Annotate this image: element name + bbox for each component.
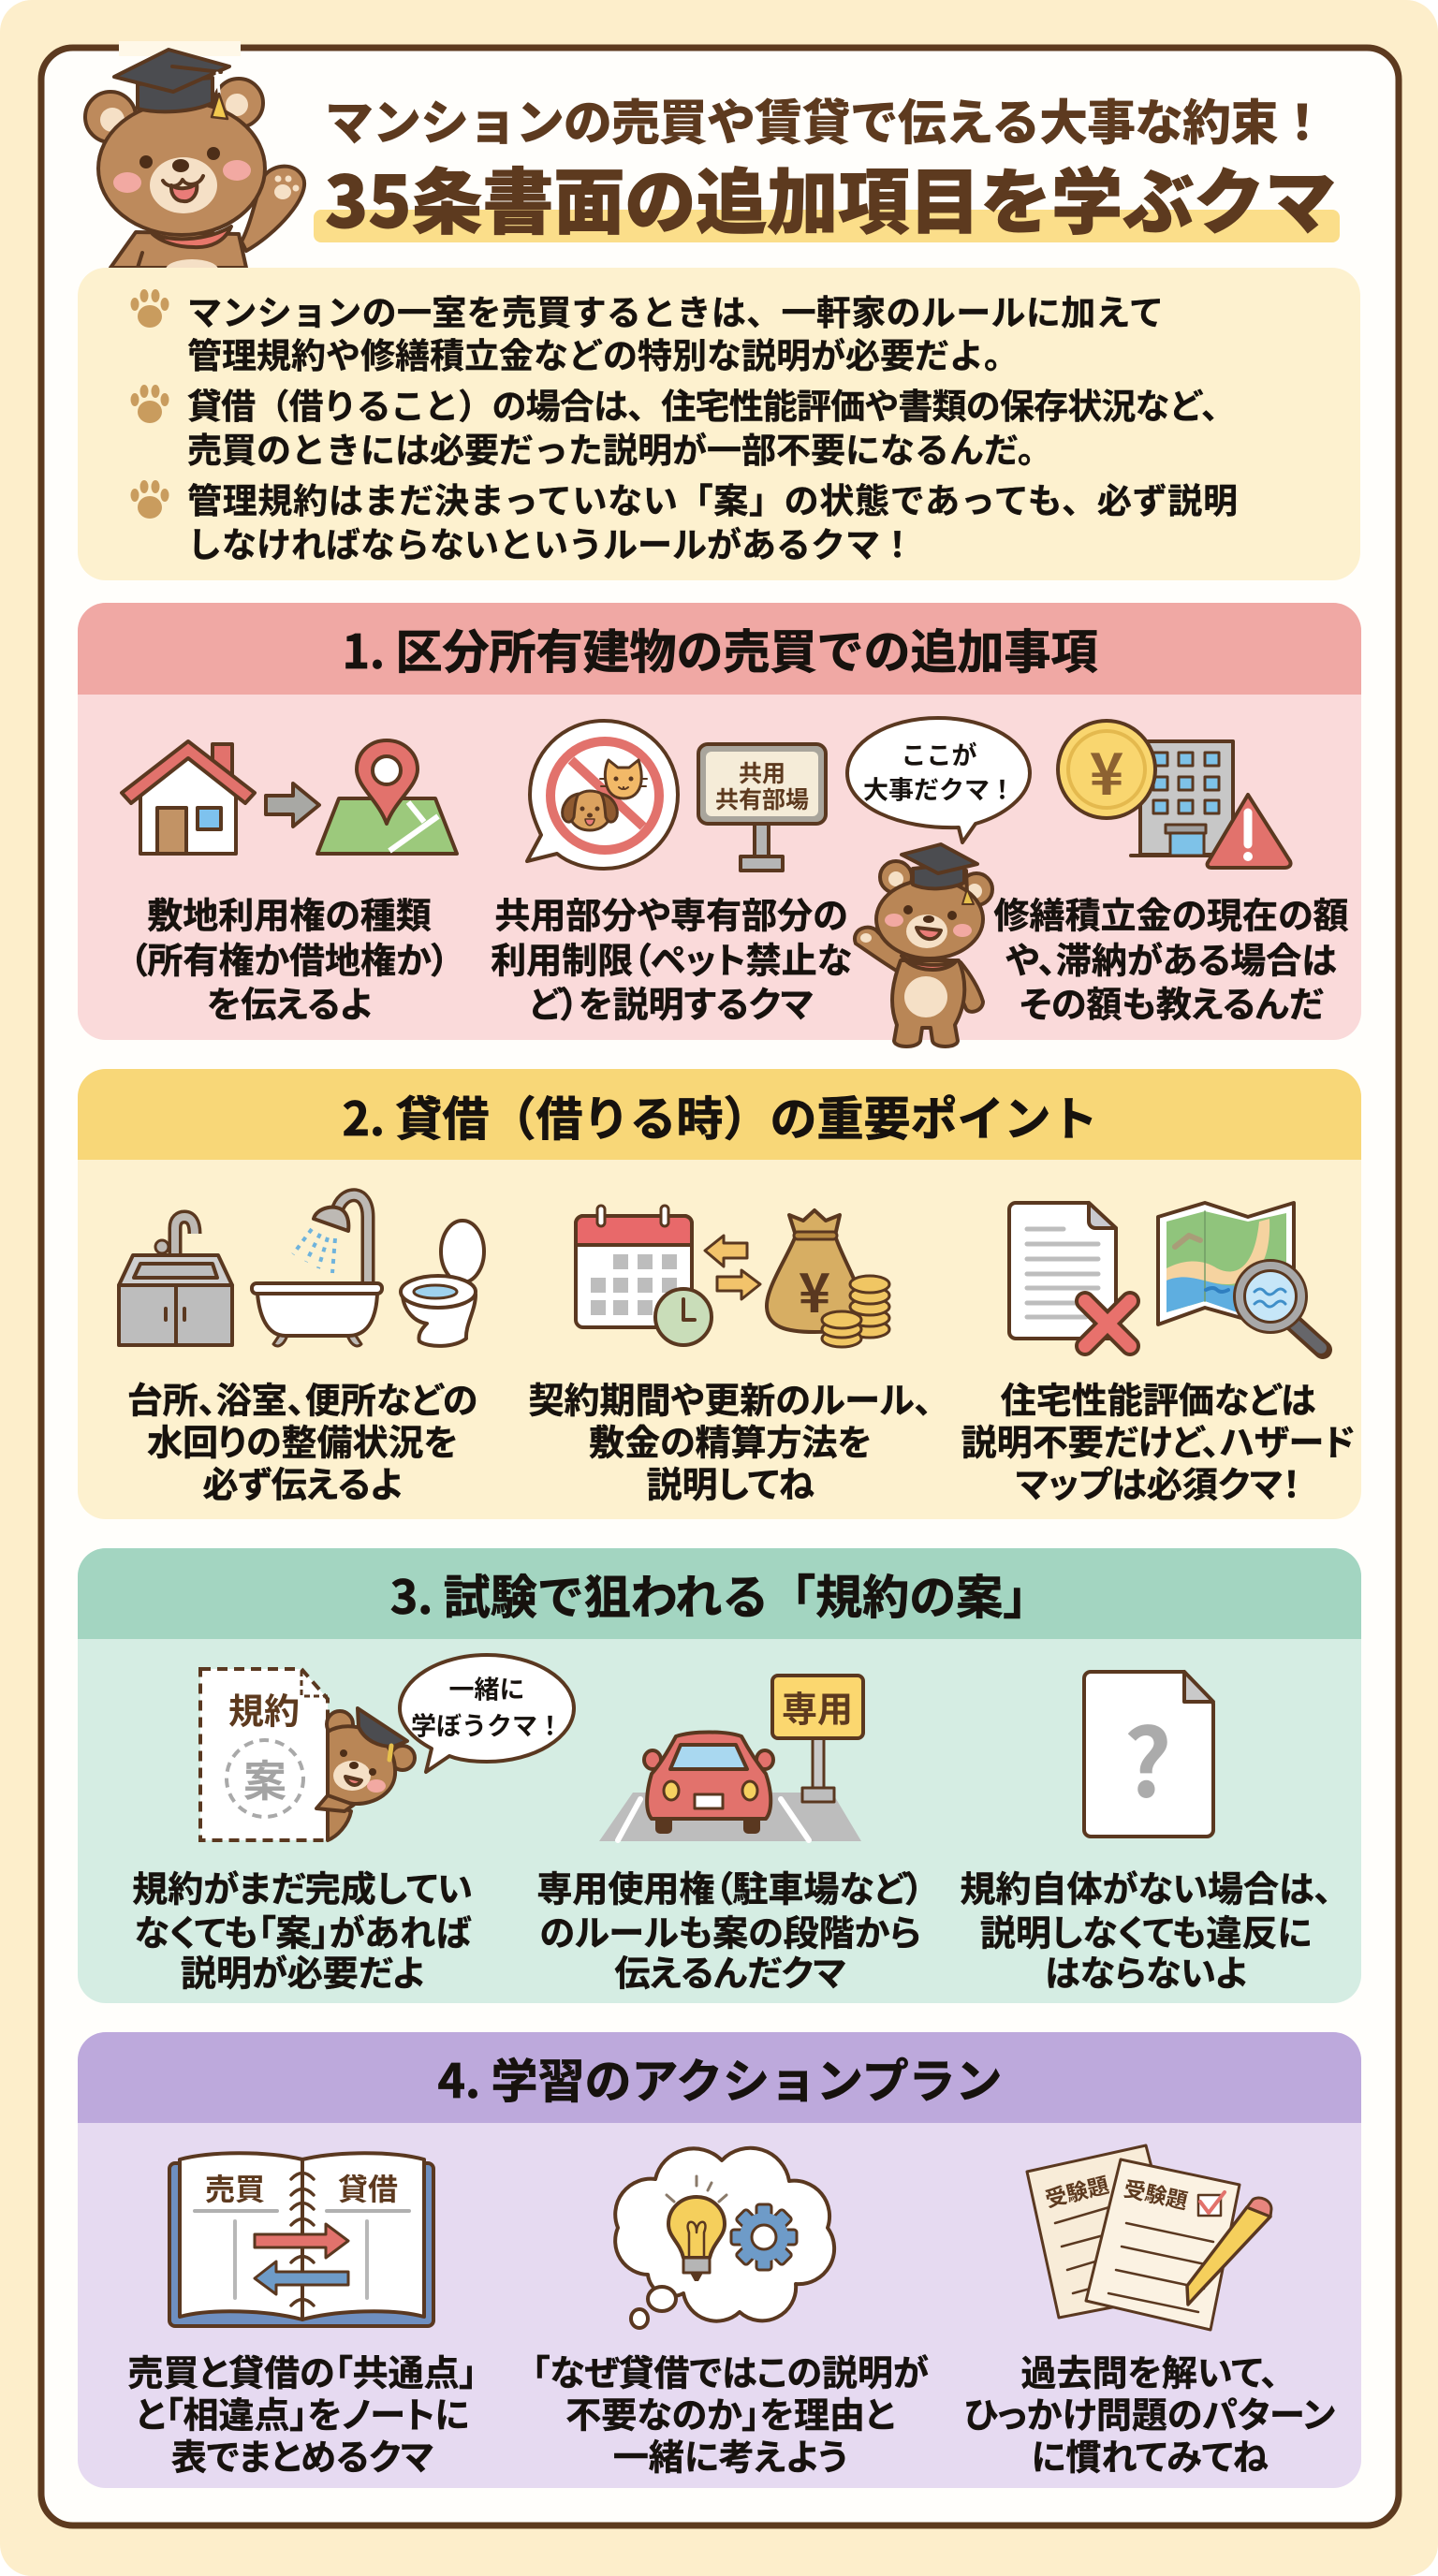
icon: past exam papers and pencil: 受験題 (1041, 2167, 1112, 2214)
intro text: 貸借（借りること）の場合は、住宅性能評価や書類の保存状況など、 (187, 378, 1236, 429)
caption 2-1: 水回りの整備状況を (147, 1413, 458, 1466)
subtitle: マンションの売買や賃貸で伝える大事な約束！ (325, 84, 1327, 154)
caption 1-1 (129, 887, 449, 1028)
caption 4-1: 売買と貸借の「共通点」 (127, 2344, 477, 2396)
caption 1-2: 利用制限（ペット禁止な (491, 932, 852, 983)
caption 3-2: のルールも案の段階から (539, 1904, 921, 1956)
caption 1-3: その額も教えるんだ (1020, 975, 1324, 1028)
caption 4-2: 一緒に考えよう (613, 2428, 847, 2481)
icon: draft rules document: 案 (243, 1748, 286, 1809)
caption 1-2: ど）を説明するクマ (529, 975, 814, 1028)
intro text: 売買のときには必要だった説明が一部不要になるんだ。 (187, 422, 1052, 473)
icon: draft rules document (200, 1669, 328, 1840)
icon: peeking bear (316, 1708, 415, 1840)
caption 4-3 (964, 2344, 1335, 2481)
icon: sink bath toilet (119, 1195, 484, 1346)
caption 2-1: 必ず伝えるよ (202, 1456, 403, 1507)
caption 2-3: 説明不要だけど、ハザード (961, 1413, 1355, 1466)
icon: past exam papers and pencil: 受験題 (1122, 2171, 1191, 2216)
caption 3-2: 専用使用権（駐車場など） (536, 1861, 924, 1911)
caption 3-1: 説明が必要だよ (181, 1945, 424, 1996)
caption 3-3: 規約自体がない場合は、 (960, 1861, 1332, 1911)
caption 2-2: 契約期間や更新のルール、 (528, 1372, 932, 1423)
speech bubble: 一緒に学ぼうクマ: 学ぼうクマ！ (411, 1705, 563, 1743)
icon: car and reserved sign (599, 1676, 863, 1841)
speech bubble: ここが大事だクマ: ここが (901, 736, 977, 771)
caption 2-2 (528, 1372, 932, 1507)
caption 2-2: 説明してね (646, 1456, 814, 1507)
icon: past exam papers and pencil (1027, 2145, 1271, 2330)
icon: hazard map with magnifier (1158, 1203, 1323, 1350)
caption 2-3 (961, 1372, 1355, 1507)
caption 1-2 (491, 887, 852, 1028)
caption 3-3 (960, 1861, 1332, 1996)
caption 3-2 (536, 1861, 924, 1996)
section 1 header (78, 603, 1361, 695)
icon: open notebook (169, 2153, 433, 2326)
icon: shared area sign: 共用 (739, 755, 785, 789)
intro text (187, 285, 1238, 567)
icon: shared area sign (698, 744, 826, 871)
caption 4-2: 「なぜ貸借ではこの説明が (532, 2344, 929, 2396)
bear mascot: header (85, 50, 304, 280)
section 1 header: 1. 区分所有建物の売買での追加事項 (342, 615, 1098, 682)
icon: calendar and money (576, 1206, 889, 1347)
caption 2-3: 住宅性能評価などは (1001, 1372, 1315, 1423)
caption 4-1: と「相違点」をノートに (136, 2387, 469, 2437)
caption 3-1: 規約がまだ完成してい (132, 1861, 473, 1911)
icon: calendar and money: ¥ (799, 1250, 830, 1328)
caption 4-1 (127, 2344, 477, 2481)
caption 1-1: 敷地利用権の種類 (147, 887, 432, 938)
section 4 header (78, 2032, 1361, 2123)
caption 3-2: 伝えるんだクマ (614, 1945, 846, 1996)
main title: 35条書面の追加項目を学ぶクマ (325, 145, 1336, 248)
title highlight bar (314, 210, 1340, 242)
speech bubble: 一緒に学ぼうクマ (400, 1655, 574, 1772)
speech bubble: ここが大事だクマ: 大事だクマ！ (863, 769, 1015, 807)
intro text: しなければならないというルールがあるクマ！ (187, 517, 915, 567)
intro text: マンションの一室を売買するときは、一軒家のルールに加えて (187, 285, 1164, 335)
title (314, 84, 1340, 248)
panel: section 3 (78, 1548, 1361, 2003)
icon: bear standing (855, 844, 992, 1046)
section 2 header: 2. 貸借（借りる時）の重要ポイント (342, 1082, 1098, 1149)
icon: paw 2 (131, 385, 169, 423)
icon: car and reserved sign: 専用 (782, 1681, 853, 1732)
icon: blank document with question mark (1084, 1672, 1213, 1837)
caption 4-3: 過去問を解いて、 (1020, 2344, 1279, 2396)
caption 4-1: 表でまとめるクマ (171, 2428, 433, 2481)
icon: paw 3 (131, 480, 169, 519)
section 4 header: 4. 学習のアクションプラン (437, 2044, 1003, 2112)
icon: thought cloud with bulb and gear (615, 2148, 834, 2328)
intro text: 管理規約はまだ決まっていない「案」の状態であっても、必ず説明 (187, 473, 1238, 523)
caption 4-3: に慣れてみてね (1032, 2428, 1269, 2481)
section 3 header: 3. 試験で狙われる「規約の案」 (390, 1560, 1049, 1628)
caption 3-1: なくても「案」があれば (134, 1904, 472, 1956)
caption 1-1: （所有権か借地権か） (129, 932, 449, 983)
caption 1-1: を伝えるよ (207, 975, 372, 1028)
caption 2-1: 台所、浴室、便所などの (127, 1372, 477, 1423)
section 2 header (78, 1069, 1361, 1160)
caption 4-2: 不要なのか」を理由と (565, 2387, 895, 2437)
section 3 header (78, 1548, 1361, 1639)
icon: coin and building (1058, 721, 1291, 868)
caption 3-3: はならないよ (1045, 1945, 1247, 1996)
icon: open notebook: 貸借 (338, 2166, 398, 2209)
panel: section 4 (78, 2032, 1361, 2488)
caption 2-2: 敷金の精算方法を (589, 1413, 872, 1466)
icon: house to land (122, 740, 457, 854)
caption 4-3: ひっかけ問題のパターン (964, 2387, 1335, 2437)
icon: no pets speech bubble (527, 721, 678, 869)
caption 1-3: や、滞納がある場合は (1005, 932, 1337, 983)
caption 3-1 (132, 1861, 473, 1996)
frame gap behind hat (119, 41, 241, 56)
icon: paw 1 (131, 289, 169, 328)
icon: coin and building: ¥ (1090, 727, 1123, 812)
icon: open notebook: 売買 (205, 2166, 265, 2209)
caption 3-3: 説明しなくても違反に (980, 1904, 1312, 1956)
icon: shared area sign: 共有部場 (715, 782, 809, 815)
panel: section 1 (78, 603, 1361, 1046)
icon: draft rules document: 規約 (228, 1683, 300, 1734)
speech bubble: ここが大事だクマ (847, 718, 1030, 842)
caption 1-3: 修繕積立金の現在の額 (994, 887, 1348, 938)
icon: blank document with question mark: ? (1123, 1689, 1172, 1823)
caption 2-3: マップは必須クマ！ (1016, 1456, 1300, 1507)
intro text: 管理規約や修繕積立金などの特別な説明が必要だよ。 (187, 328, 1019, 378)
panel: intro (78, 268, 1360, 580)
caption 1-3 (994, 887, 1348, 1028)
icon: document with cross (1009, 1203, 1130, 1346)
panel: section 2 (78, 1069, 1361, 1519)
speech bubble: 一緒に学ぼうクマ: 一緒に (449, 1670, 524, 1705)
caption 4-2 (532, 2344, 929, 2481)
caption 1-2: 共用部分や専有部分の (494, 887, 848, 938)
caption 2-1 (127, 1372, 477, 1507)
